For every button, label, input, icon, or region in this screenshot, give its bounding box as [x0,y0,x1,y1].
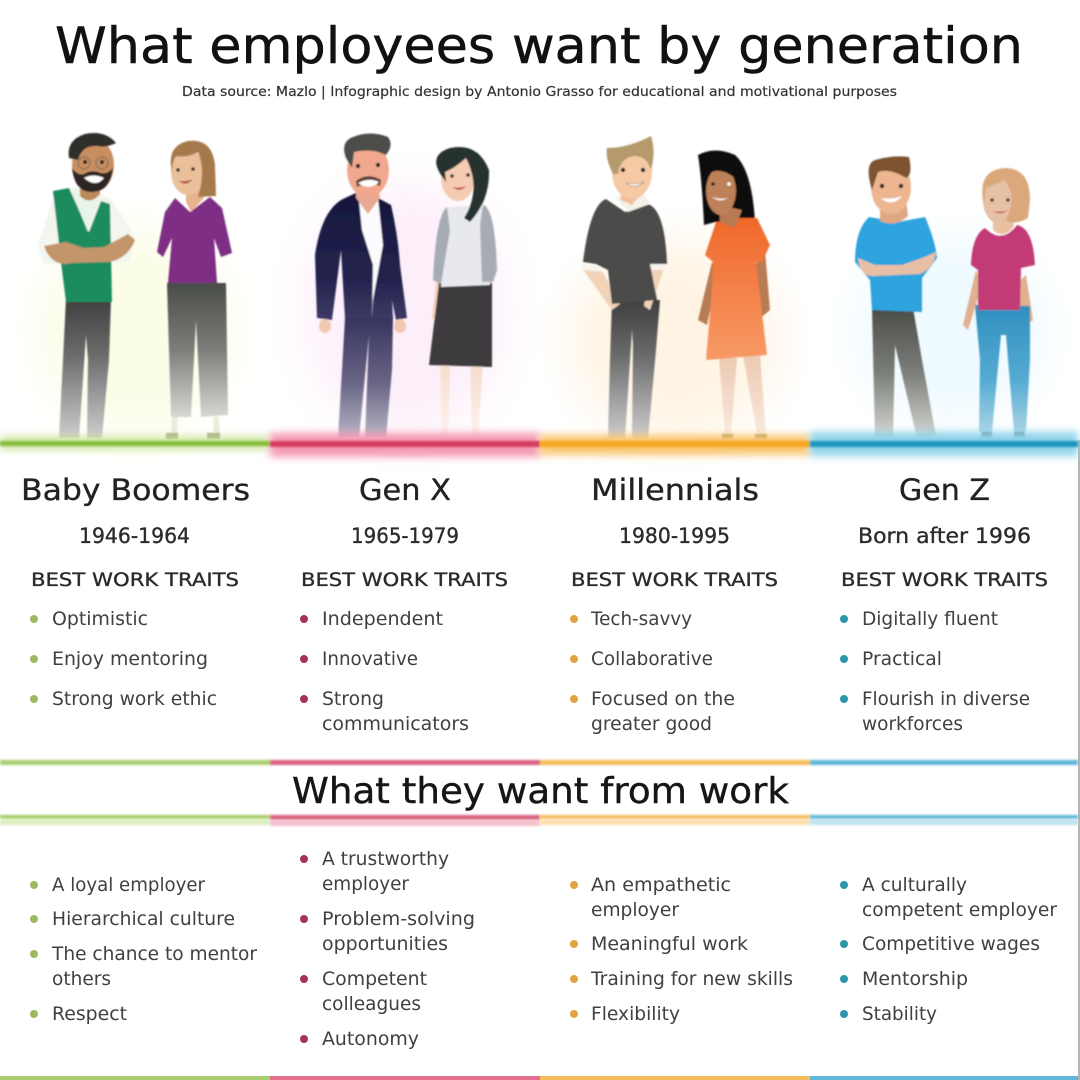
list: Millennials wants: Meaningful work [591,933,748,955]
woman: Gen X [429,147,497,438]
traits list: Collaborative [591,648,713,670]
birth years: 1965-1979 [351,524,459,548]
traits list: Practical [862,648,942,670]
list: Millennials wants: employer [591,899,679,921]
traits list [570,608,735,735]
list: Baby Boomers wants: others [52,968,111,990]
list: Baby Boomers wants [30,874,257,1025]
list: Gen X wants [300,848,475,1050]
generation name: Gen Z [899,473,990,507]
traits list [300,608,469,735]
traits list: communicators [322,713,469,735]
traits list [30,608,217,710]
right edge line [1078,440,1080,1080]
list: Millennials wants: Flexibility [591,1003,680,1025]
list: Gen X wants: Problem-solving [322,908,475,930]
data source line: Data source: Mazlo | Infographic design by Antonio Grasso for educational and motivational purposes [182,85,897,100]
woman: Gen Z [963,168,1035,439]
lower section divider bars [0,815,1078,826]
figures panel: Gen Z [855,156,1045,439]
traits list: Tech-savvy [590,608,692,630]
traits heading: BEST WORK TRAITS [571,569,778,591]
traits list: Digitally fluent [862,608,998,630]
traits list [840,608,1030,735]
man: Gen X [315,134,407,438]
traits list: Independent [322,608,443,630]
list: Gen X wants: Competent [322,968,427,990]
man: Millennial [581,136,667,438]
panel: Gen Z traits [840,473,1048,735]
woman: Millennial [698,150,770,439]
traits heading: BEST WORK TRAITS [841,569,1048,591]
figures panel: Baby Boomers [38,133,232,439]
list: Gen X wants: A trustworthy [322,848,449,870]
list: Gen Z wants: Competitive wages [862,933,1040,955]
man: Gen Z [855,156,937,438]
birth years: 1980-1995 [619,524,730,548]
list: Millennials wants: An empathetic [591,874,731,896]
panel: Millennials traits [570,473,778,735]
list: Gen X wants: colleagues [322,993,421,1015]
man: Baby Boomer [38,133,135,438]
figures panel: Gen X [305,134,505,438]
figures panel: Millennials [570,136,780,440]
traits list: workforces [862,713,963,735]
list: Gen X wants: opportunities [322,933,448,955]
traits list: Strong work ethic [52,688,217,710]
traits heading: BEST WORK TRAITS [31,569,239,591]
list: Gen X wants: employer [322,873,409,895]
glowing colour bars under figures [0,432,1078,457]
list: Gen X wants: Autonomy [322,1028,419,1050]
list: Gen Z wants: Stability [862,1003,937,1025]
woman: Baby Boomer [157,141,232,439]
panel: Baby Boomers traits [21,473,250,710]
list: Gen Z wants [840,874,1057,1025]
traits list: Focused on the [591,688,735,710]
panel: Gen X traits [300,473,508,735]
generation name: Millennials [591,473,759,507]
birth years: 1946-1964 [79,524,190,548]
list: Gen Z wants: Mentorship [862,968,968,990]
list: Baby Boomers wants: Hierarchical culture [52,908,235,930]
list: Millennials wants [570,874,793,1025]
bottom colour bars [0,1076,1078,1080]
list: Baby Boomers wants: The chance to mentor [51,943,257,965]
title: What employees want by generation [55,17,1023,75]
generation name: Gen X [359,473,451,507]
birth years: Born after 1996 [858,524,1031,548]
traits list: Flourish in diverse [862,688,1030,710]
traits list: Innovative [322,648,418,670]
traits list: Strong [322,688,384,710]
upper section divider bars [0,760,1078,765]
traits list: Optimistic [52,608,148,630]
list: Millennials wants: Training for new skills [590,968,793,990]
traits heading: BEST WORK TRAITS [301,569,508,591]
list: Baby Boomers wants: Respect [52,1003,127,1025]
traits list: greater good [591,713,712,735]
list: Baby Boomers wants: A loyal employer [52,874,205,896]
generation name: Baby Boomers [21,473,250,507]
list: Gen Z wants: competent employer [862,899,1057,921]
list: Gen Z wants: A culturally [862,874,967,896]
traits list: Enjoy mentoring [52,648,208,670]
section heading: What they want from work [292,771,789,812]
